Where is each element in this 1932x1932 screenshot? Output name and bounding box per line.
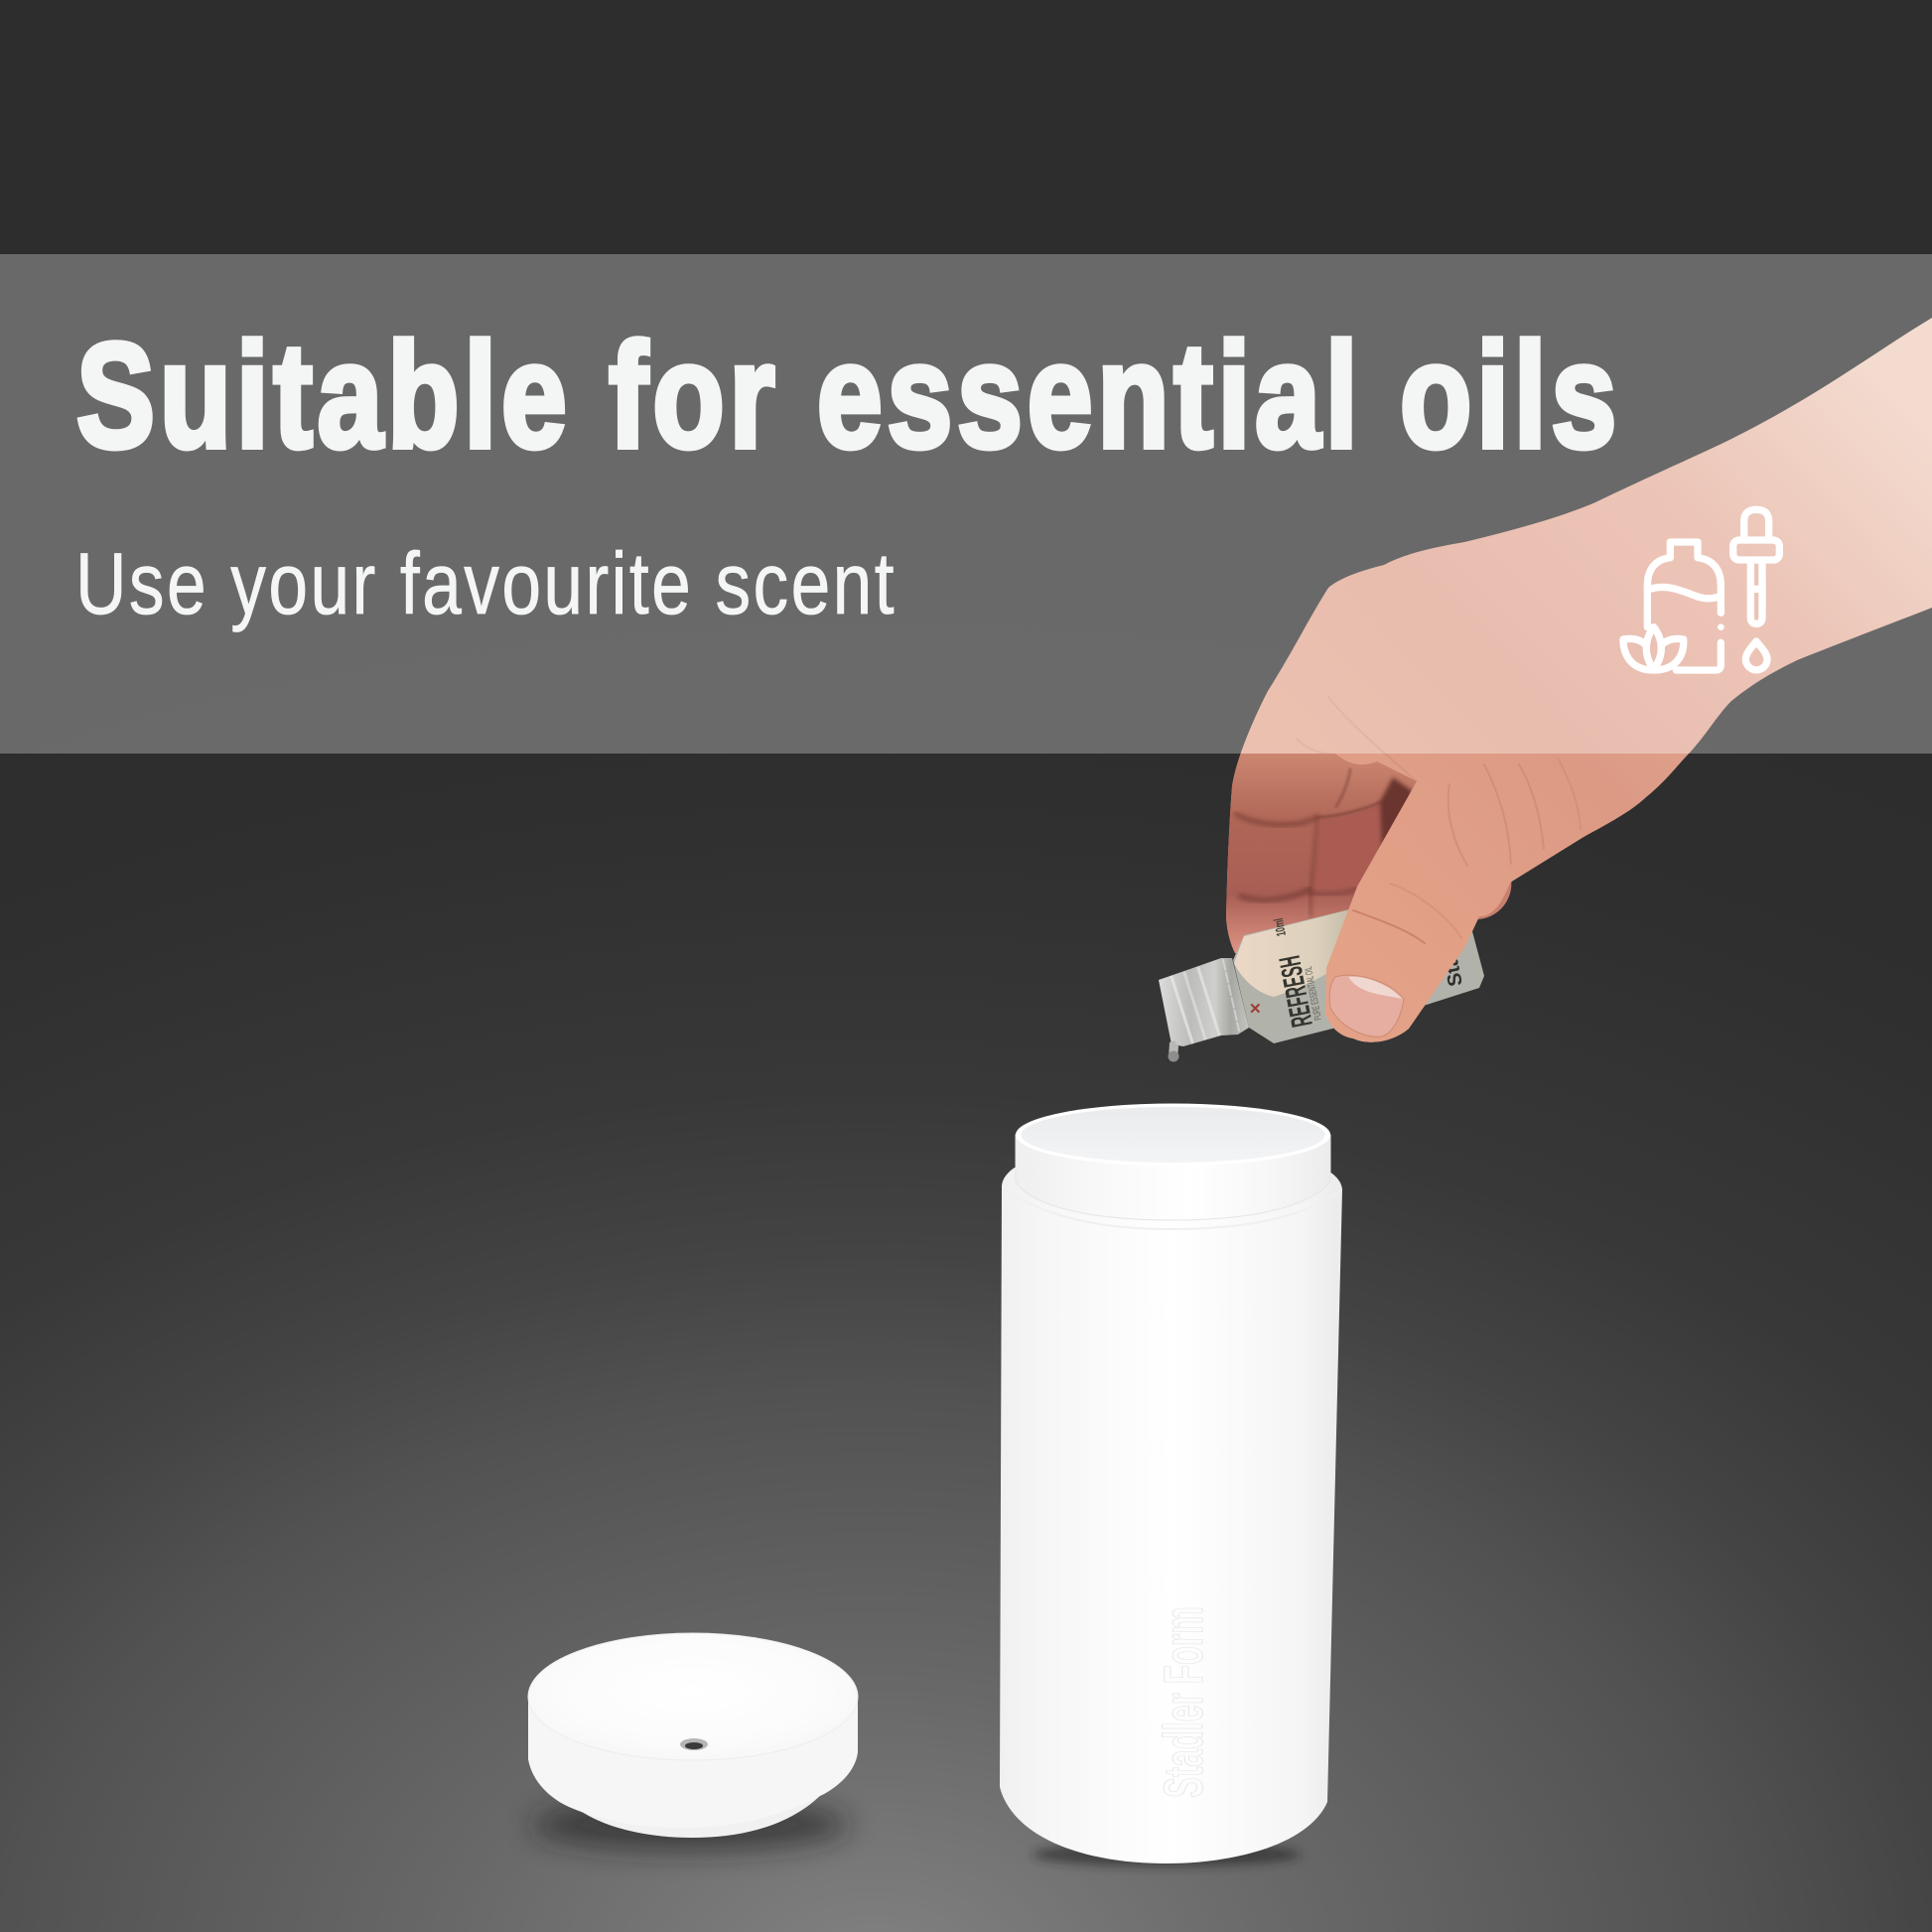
shoulder lip line bbox=[1004, 1189, 1340, 1229]
icon bottle dot bbox=[1718, 623, 1725, 630]
icon dropper bbox=[1744, 509, 1769, 623]
embossed brand text: Stadler Form bbox=[1152, 1606, 1214, 1798]
red mark: ✕ bbox=[1249, 1001, 1262, 1018]
lid foot ring bbox=[569, 1787, 828, 1838]
finger base shading bbox=[1226, 754, 1417, 953]
label text essential oil: PURE ESSENTIAL OIL bbox=[1304, 965, 1324, 1022]
hand silhouette bbox=[1226, 318, 1932, 1042]
icon: essential oil bottle and dropper bbox=[1623, 509, 1779, 670]
label text volume: 10ml bbox=[1271, 917, 1289, 937]
inner opening bbox=[1021, 1107, 1324, 1163]
cylinder body bbox=[1000, 1168, 1342, 1863]
thumb and hand wrinkles bbox=[1353, 759, 1581, 943]
rim bbox=[1016, 1104, 1330, 1166]
gap between fingers bbox=[1380, 777, 1413, 854]
lid side wall bbox=[528, 1697, 858, 1828]
icon liquid line bbox=[1647, 587, 1721, 599]
white cylinder diffuser bbox=[1000, 1104, 1342, 1866]
icon bottle bbox=[1647, 542, 1721, 670]
bottle body bbox=[1233, 908, 1484, 1043]
lid dish surface bbox=[528, 1633, 858, 1760]
inner sleeve bbox=[1016, 1135, 1330, 1220]
third finger behind bbox=[1469, 879, 1511, 919]
icon drop bbox=[1745, 641, 1767, 670]
icon lotus bbox=[1623, 627, 1684, 670]
oil bottle bbox=[1159, 908, 1484, 1062]
bottle threads bbox=[1172, 960, 1239, 1042]
fingers bbox=[1226, 754, 1417, 953]
thumb bbox=[1325, 754, 1608, 1042]
thumbnail bbox=[1329, 975, 1404, 1036]
bottle neck bbox=[1159, 958, 1249, 1046]
label text brand: Stadler bbox=[1433, 917, 1467, 988]
middle finger bbox=[1320, 804, 1380, 888]
finger creases bbox=[1236, 769, 1380, 915]
bottle label bbox=[1234, 910, 1353, 997]
hand holding bottle bbox=[1159, 254, 1932, 1062]
lightened hand above banner edge bbox=[1384, 754, 1418, 782]
lid shadow bbox=[531, 1799, 849, 1851]
icon dropper collar bbox=[1733, 540, 1779, 560]
subtitle: Use your favourite scent bbox=[75, 534, 897, 632]
oil drop bbox=[1168, 1040, 1179, 1062]
base shadow bbox=[1033, 1843, 1301, 1866]
translucent banner bbox=[0, 254, 1932, 754]
label text REFRESH: REFRESH bbox=[1274, 953, 1319, 1030]
diffuser lid bbox=[528, 1633, 858, 1851]
lid centre hole bbox=[680, 1738, 708, 1750]
